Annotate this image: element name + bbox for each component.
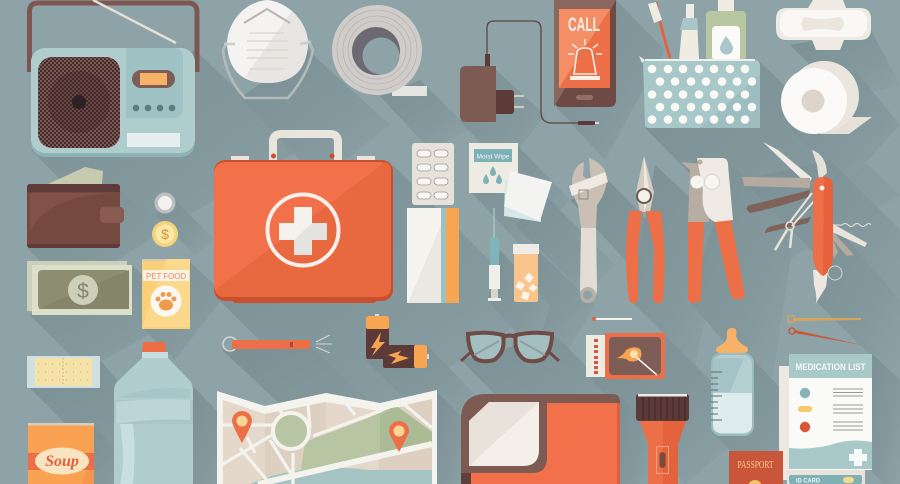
polka dot pouch [639,56,760,128]
charger cable [487,21,578,123]
radio body [31,48,195,157]
toothbrush [648,2,670,58]
blanket folded corner [461,394,547,473]
id card [787,470,865,484]
pill icons [800,388,810,398]
bottle cap [142,342,166,352]
pill blister pack [412,143,454,205]
map pin 1 [232,411,252,443]
passport [729,451,783,484]
matchbox [586,333,665,379]
syringe [488,208,501,301]
toothpaste tube [679,4,699,60]
pliers [626,156,665,304]
medicine box [407,208,459,303]
wallet [27,167,124,248]
banknotes [27,261,132,315]
icon: water drops [483,166,502,184]
coins: $ [161,226,169,242]
moist wipe packet [469,143,518,193]
eyeglasses [461,333,559,361]
pet food label: PET FOOD [146,271,186,281]
baby bottle [711,328,754,436]
cable ties [788,316,862,345]
kit case [232,285,377,303]
phone [554,0,616,107]
flashlight [636,394,689,484]
cross emblem [268,194,338,266]
pet food can [142,259,190,329]
sanitary pad [776,0,871,50]
icon: lightning bolt [371,332,385,356]
radio dial [132,70,175,88]
face mask [223,0,313,98]
bottle body [711,353,754,436]
soup label: Soup [45,453,79,470]
soap bottle [706,0,746,61]
icon: flame [617,347,642,362]
wrench [569,158,608,303]
crackers [27,356,100,388]
list header [789,354,872,378]
phone charger [460,21,599,125]
wipe sheet [504,171,552,222]
radio [30,0,197,157]
banknotes: $ [77,280,89,303]
flashlight head [636,394,689,421]
match stick [592,317,632,321]
radio antenna [93,0,176,43]
medication list: MEDICATION LIST [796,362,866,373]
whistle [223,335,332,353]
soup can [28,423,94,484]
coins [152,192,178,247]
knife handle [813,177,833,276]
phone screen [559,9,610,88]
knife bottom tool [813,270,828,303]
phone: CALL [568,15,600,36]
tape roll [332,5,427,96]
passport: PASSPORT [738,459,774,471]
radio speaker [38,57,120,148]
toilet paper roll [781,61,872,134]
map pin 2 [389,421,409,452]
water area [250,468,432,484]
mask ear loops [224,42,311,44]
kit handle [273,134,338,160]
medication list [779,354,872,480]
wallet strap [100,207,124,223]
bottle nipple [716,328,748,353]
blanket [461,394,620,484]
batteries [366,314,429,368]
pill bottle [513,244,539,302]
radio handle [30,3,197,72]
first aid kit [214,134,393,303]
icon: siren [568,39,602,80]
can opener [681,158,745,303]
water bottle [114,342,193,484]
moist wipe packet: Moist Wipe [476,154,510,160]
banknotes in wallet [48,167,103,184]
charger body [494,90,514,114]
pocket knife [742,142,871,303]
wave footer [789,441,872,469]
map [217,390,437,484]
radio buttons [133,105,175,111]
flashlight switch [656,446,668,474]
icon: paw [156,292,176,310]
